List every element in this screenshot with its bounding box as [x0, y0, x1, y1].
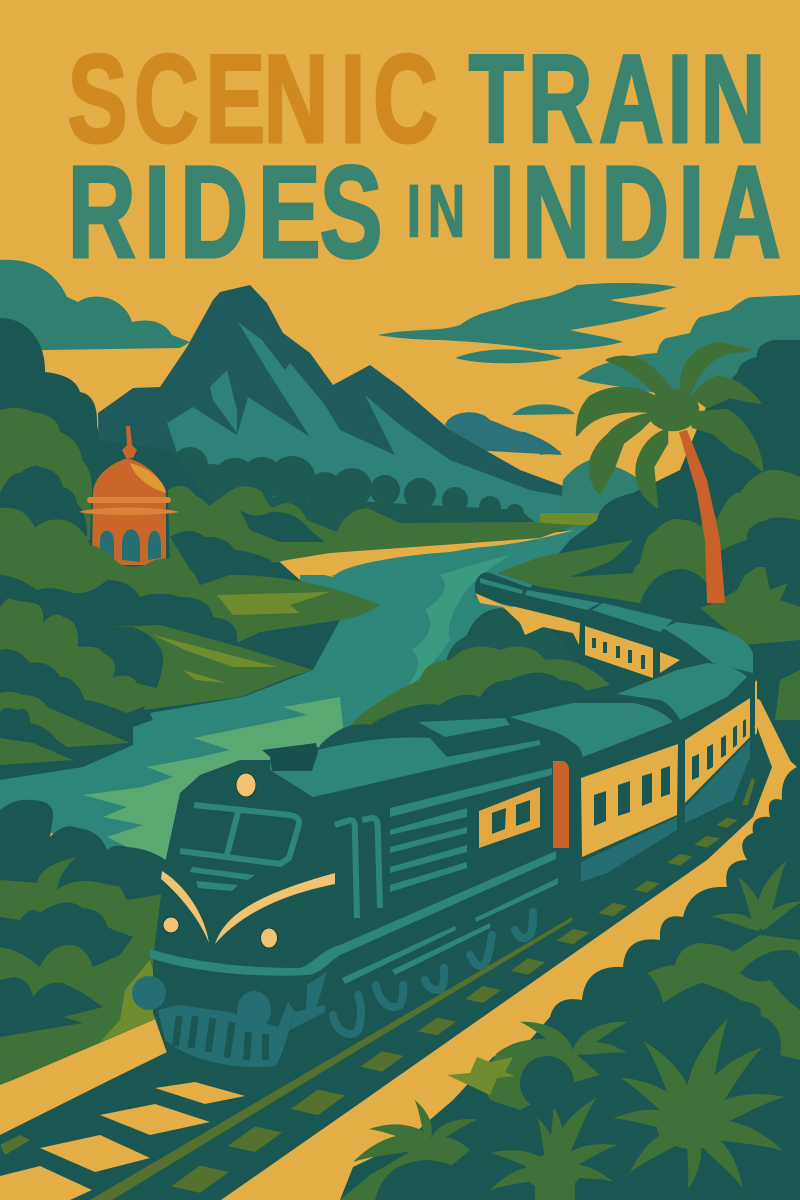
green bush	[647, 935, 800, 1060]
top green bush	[0, 408, 92, 540]
title: INDIA	[489, 140, 781, 286]
frond upper right	[710, 856, 800, 931]
frond large	[613, 1013, 788, 1192]
dark fill behind far train	[460, 608, 660, 700]
palm tree	[577, 343, 762, 603]
dark lower bump	[375, 1160, 490, 1200]
far carriage windows	[585, 626, 680, 678]
river	[0, 525, 600, 865]
grille	[158, 1002, 295, 1067]
olive island	[153, 635, 277, 667]
distant hills	[540, 460, 700, 540]
olive bank 1	[217, 592, 330, 615]
palm fronds	[577, 343, 762, 507]
roof panels	[270, 738, 540, 797]
far arch viaduct	[475, 593, 580, 645]
palm trunk	[679, 430, 725, 603]
clouds right	[378, 283, 800, 455]
far roof segments	[480, 578, 753, 673]
hill between river and train	[320, 608, 660, 760]
mountains	[98, 285, 615, 540]
right foreground forest	[340, 765, 800, 1200]
wheels	[333, 912, 533, 1034]
left forest	[0, 318, 575, 780]
lower body strips	[342, 926, 456, 984]
orange door	[553, 761, 569, 848]
title	[68, 30, 781, 286]
dark patch	[0, 465, 87, 537]
right forest	[497, 340, 800, 780]
near roof segments	[510, 663, 747, 757]
green bank 2	[0, 508, 380, 643]
side ribs	[335, 818, 380, 918]
temple	[79, 426, 179, 565]
side louvres	[390, 768, 552, 892]
frond bottom centre	[487, 1091, 619, 1200]
frond low left	[340, 1097, 480, 1200]
front stripes	[161, 871, 209, 943]
green bank 5	[0, 692, 130, 747]
green bank 3	[0, 599, 190, 713]
green island	[110, 625, 313, 710]
carriage silhouette	[475, 572, 757, 900]
loco body	[153, 718, 581, 1070]
waist line	[150, 851, 556, 976]
dark bush inset	[740, 950, 800, 1010]
title: SCENIC	[68, 30, 438, 170]
roof vent	[262, 743, 318, 771]
frond mid	[480, 1013, 631, 1110]
train carriages	[475, 572, 757, 900]
dark mass	[340, 765, 800, 1200]
olive leaf	[447, 1057, 515, 1095]
front bumpers	[132, 976, 166, 1010]
right-of-temple bush	[168, 486, 240, 570]
far forest	[130, 447, 535, 530]
headlights	[163, 773, 278, 948]
dark forest base	[0, 318, 340, 780]
ridge green	[190, 486, 575, 580]
railway sleepers and rail	[0, 778, 755, 1200]
coupling	[290, 1005, 325, 1030]
green bank 6	[0, 738, 73, 765]
dark bump	[520, 1056, 574, 1110]
title: RIDES	[68, 140, 383, 286]
title: IN	[407, 169, 465, 253]
front vents	[190, 867, 255, 880]
left foreground forest	[0, 800, 170, 1085]
near carriage 1	[581, 744, 678, 882]
title: TRAIN	[469, 30, 766, 170]
near carriage 2	[685, 680, 757, 823]
cab window	[479, 787, 540, 848]
clouds left	[0, 260, 190, 352]
ground and track bed	[0, 727, 800, 1200]
locomotive	[132, 718, 581, 1070]
ridge shadows	[170, 510, 325, 585]
windscreen	[180, 805, 299, 864]
